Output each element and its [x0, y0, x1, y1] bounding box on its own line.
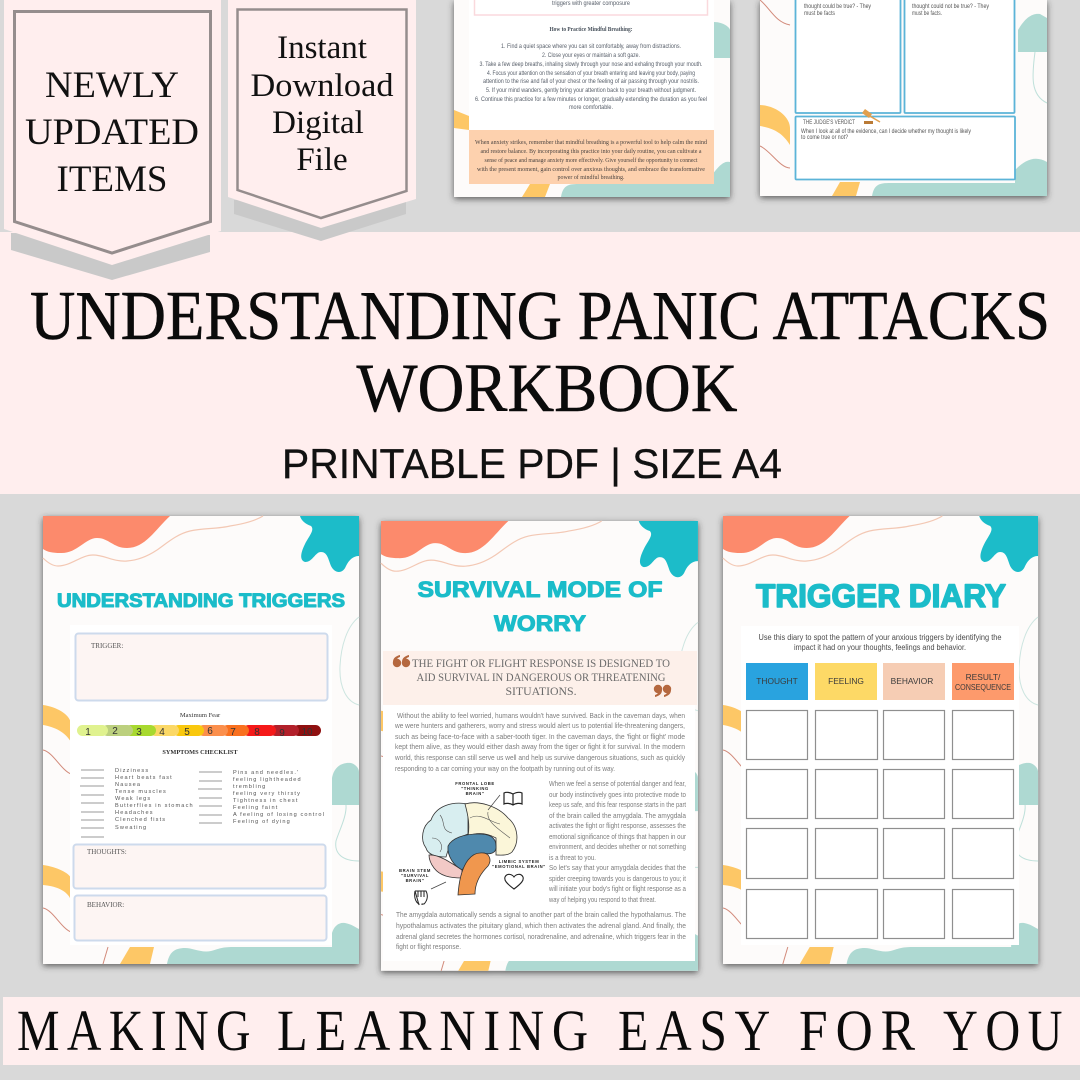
banner: newly updated items — [4, 0, 221, 280]
tagline strip: EASY — [618, 998, 778, 1063]
brain diagram — [399, 781, 546, 905]
fear scale — [77, 712, 321, 739]
banner: newly updated items: UPDATED — [25, 112, 199, 153]
page heading: TRIGGER DIARY — [756, 578, 1006, 614]
instructions — [741, 626, 1019, 945]
how to practice instructions: 3. Take a few deep breaths, inhaling slowly through your nose and exhaling through your mouth. — [480, 61, 703, 68]
icon: raised fist — [415, 891, 427, 905]
icon: closing quote mark — [654, 685, 671, 697]
column header: behavior: BEHAVIOR — [891, 676, 933, 686]
symptoms checklist: trembling — [233, 784, 266, 790]
closing paragraph: The amygdala automatically sends a signal to another part of the brain called the hypothalamus. The — [396, 910, 686, 919]
right column text: will initiate your body's fight or flight response as a — [548, 884, 687, 893]
fear scale: 6 — [207, 726, 213, 737]
title: WORKBOOK — [356, 350, 738, 426]
closing paragraph: fight or flight response. — [396, 942, 461, 951]
right column text: activates the fight or flight response, assesses the — [549, 821, 686, 830]
right column text: is a threat to you. — [549, 853, 596, 862]
fear scale: 2 — [112, 726, 118, 737]
fear scale: 9 — [279, 728, 285, 739]
peach summary box: with the present moment, gain control over anxious thoughts, and embrace the transformative — [477, 166, 705, 173]
pink title band — [0, 232, 1080, 494]
banner: newly updated items: NEWLY — [45, 65, 179, 106]
label: frontal lobe — [455, 781, 495, 796]
intro paragraph — [394, 711, 685, 773]
right column text: of the brain called the amygdala. The amygdala — [549, 811, 687, 820]
quote block — [383, 651, 697, 705]
column header: feeling: FEELING — [828, 676, 864, 686]
quote block: THE FIGHT OR FLIGHT RESPONSE IS DESIGNED TO — [412, 656, 670, 670]
label: brain stem: BRAIN" — [406, 878, 424, 883]
icon: gavel — [862, 109, 880, 124]
symptoms checklist: Pins and needles.' — [233, 770, 299, 776]
symptoms checklist: A feeling of losing control — [233, 812, 325, 818]
peach summary box: sense of peace and manage anxiety more effectively. Give yourself the opportunity to connect — [484, 157, 698, 164]
fear scale: 5 — [184, 727, 190, 738]
right column text: spider creeping towards you is dangerous to you; it — [549, 874, 686, 883]
tagline strip: MAKING — [17, 998, 258, 1063]
fear scale: 7 — [230, 727, 236, 738]
icon: open book — [504, 792, 522, 805]
page heading — [418, 577, 662, 636]
label: frontal lobe: "THINKING — [461, 786, 489, 791]
page heading: SURVIVAL MODE OF — [418, 577, 662, 602]
banner: instant download digital file: File — [296, 142, 348, 178]
column header: feeling — [815, 663, 877, 700]
instructions: Use this diary to spot the pattern of your anxious triggers by identifying the — [758, 633, 1002, 642]
how to practice instructions — [475, 26, 707, 111]
evidence for box: must be facts — [804, 11, 835, 17]
evidence for box — [796, 0, 900, 113]
evidence against box: must be facts. — [912, 11, 942, 17]
right column text — [548, 779, 687, 904]
intro paragraph: Without the ability to feel worried, humans wouldn't have survived. Back in the caveman days, when — [397, 711, 685, 720]
label: limbic system: "EMOTIONAL BRAIN" — [492, 864, 546, 869]
fear scale: 4 — [159, 727, 165, 738]
fear scale: Maximum Fear — [180, 712, 221, 719]
how to practice instructions: more comfortable. — [569, 104, 613, 111]
right column text: keep us safe, and this fear response starts in the part — [549, 800, 686, 809]
how to practice instructions: 1. Find a quiet space where you can sit comfortably, away from distractions. — [501, 43, 681, 50]
column header: result — [952, 663, 1014, 700]
symptoms checklist: Heart beats fast — [115, 775, 173, 781]
worksheet page: mindful breathing — [454, 0, 730, 197]
fear scale: 8 — [254, 727, 260, 738]
right column text: So let's say that your amygdala decides that the — [549, 863, 686, 872]
page: survival mode of worry — [381, 521, 698, 971]
intro paragraph: such as being face-to-face with a saber-tooth tiger. In the caveman days, the 'fight or flight' mode — [395, 732, 685, 741]
evidence against box: thought could not be true? - They — [912, 4, 989, 10]
verdict box: THE JUDGE'S VERDICT — [803, 120, 855, 126]
intro paragraph: we were hunters and gatherers, worry and stress would alert us to potential life-threatening dangers, — [394, 721, 685, 730]
peach summary box: and restore balance. By incorporating this practice into your daily routine, you can cultivate a — [480, 148, 702, 155]
trigger box: TRIGGER: — [91, 642, 123, 650]
symptoms checklist: Tightness in chest — [233, 798, 299, 804]
trigger box — [76, 634, 328, 700]
closing paragraph: hypothalamus activates the pituitary gland, which then activates the adrenal gland. And finally, the — [396, 921, 686, 930]
icon: opening quote mark — [393, 655, 410, 667]
tagline strip: LEARNING — [277, 998, 596, 1063]
symptoms checklist: Feeling faint — [233, 805, 278, 811]
page: trigger diary — [723, 516, 1038, 964]
fear scale: 1 — [85, 727, 91, 738]
label: brain stem: "SURVIVAL — [401, 873, 429, 878]
worksheet page: the judge's verdict — [760, 0, 1047, 196]
label: limbic system: LIMBIC SYSTEM — [499, 859, 539, 864]
symptoms checklist: Nausea — [115, 782, 141, 788]
pink callout box — [474, 0, 708, 15]
how to practice instructions: 2. Close your eyes or maintain a soft gaze. — [542, 52, 640, 59]
title — [30, 278, 1050, 426]
right column text: way of helping you respond to that threat. — [548, 895, 656, 904]
right column text: emotional significance of things that happen in our — [549, 832, 686, 841]
quote block: SITUATIONS. — [505, 684, 577, 698]
quote block: AID SURVIVAL IN DANGEROUS OR THREATENING — [416, 670, 666, 684]
how to practice instructions: 5. If your mind wanders, gently bring your attention back to your breath without judgment. — [486, 87, 696, 94]
right column text: our body instinctively goes into protective mode to — [549, 790, 686, 799]
label: frontal lobe: BRAIN" — [466, 791, 484, 796]
verdict box: to come true or not? — [801, 135, 849, 141]
verdict box: When I look at all of the evidence, can I decide whether my thought is likely — [801, 129, 971, 135]
label: limbic system — [492, 859, 546, 869]
column header: result: RESULT/ — [966, 672, 1001, 682]
banner: instant download digital file: Instant — [277, 30, 367, 66]
behavior box — [74, 896, 326, 940]
right column text: environment, and decides whether or not something — [549, 842, 686, 851]
peach summary box — [469, 130, 714, 184]
thoughts box — [74, 844, 326, 888]
page heading: WORRY — [494, 611, 586, 636]
subtitle: PRINTABLE PDF | SIZE A4 — [282, 440, 782, 487]
banner: instant download digital file: Download — [250, 68, 394, 104]
symptoms heading: SYMPTOMS CHECKLIST — [162, 749, 238, 756]
symptoms checklist: feeling very thirsty — [233, 791, 301, 797]
column header: thought: THOUGHT — [756, 676, 798, 686]
symptoms checklist: Weak legs — [115, 796, 151, 802]
symptoms checklist: Tense muscles — [115, 789, 167, 795]
column header: behavior — [883, 663, 945, 700]
peach summary box: When anxiety strikes, remember that mindful breathing is a powerful tool to help calm the mind — [475, 139, 708, 146]
how to practice instructions: 4. Focus your attention on the sensation of your breath entering and leaving your body, paying — [487, 70, 695, 77]
label: brain stem: BRAIN STEM — [399, 868, 431, 873]
how to practice instructions: 6. Continue this practice for a few minutes or longer, gradually extending the duration as you feel — [475, 96, 707, 103]
page heading: UNDERSTANDING TRIGGERS — [57, 590, 345, 612]
thoughts box: THOUGHTS: — [87, 848, 127, 856]
evidence for box: thought could be true? - They — [804, 4, 871, 10]
closing paragraph: adrenal gland secretes the hormones cortisol, noradrenaline, and adrenaline, which triggers fear in the — [396, 932, 686, 941]
pink callout box: triggers with greater composure — [552, 0, 630, 7]
instructions: impact it had on your thoughts, feelings and behavior. — [794, 643, 966, 652]
symptoms checklist: Feeling of dying — [233, 819, 291, 825]
symptoms checklist: Dizziness — [115, 768, 149, 774]
column header: result: CONSEQUENCE — [955, 682, 1011, 692]
behavior box: BEHAVIOR: — [87, 901, 124, 909]
column header: thought — [746, 663, 808, 700]
closing paragraph — [396, 910, 686, 951]
diary grid — [746, 710, 1014, 938]
evidence against box — [904, 0, 1014, 113]
peach summary box: power of mindful breathing. — [558, 174, 625, 181]
intro paragraph: world, this response can still serve us well and help us survive dangerous situations, such as quickly — [394, 753, 685, 762]
tagline strip — [3, 997, 1080, 1065]
symptoms checklist: Sweating — [115, 825, 147, 831]
page: understanding triggers — [43, 516, 359, 964]
tagline strip: FOR — [799, 998, 923, 1063]
symptoms checklist — [80, 768, 325, 837]
fear scale: 10 — [301, 727, 313, 738]
icon: heart — [505, 874, 523, 889]
how to practice instructions: How to Practice Mindful Breathing: — [550, 26, 632, 33]
banner: instant download digital file — [228, 0, 416, 241]
right column text: When we feel a sense of potential danger and fear, — [549, 779, 686, 788]
how to practice instructions: attention to the rise and fall of your chest or the feeling of air passing through your nostrils. — [483, 78, 699, 85]
banner: instant download digital file: Digital — [272, 105, 364, 141]
symptoms checklist: Butterflies in stomach — [115, 803, 194, 809]
fear scale: 3 — [136, 727, 142, 738]
verdict box — [796, 116, 1015, 180]
symptoms checklist: feeling lightheaded — [233, 777, 302, 783]
symptoms checklist: Clenched fists — [115, 817, 166, 823]
banner: newly updated items: ITEMS — [56, 159, 168, 200]
symptoms checklist: Headaches — [115, 810, 154, 816]
label: frontal lobe: FRONTAL LOBE — [455, 781, 495, 786]
intro paragraph: kept them alive, as they would either dash away from the tiger or fight it for survival. In the modern — [395, 742, 685, 751]
intro paragraph: responding to a car coming your way on the footpath by running out of its way. — [395, 764, 615, 773]
label: brain stem — [399, 868, 431, 883]
